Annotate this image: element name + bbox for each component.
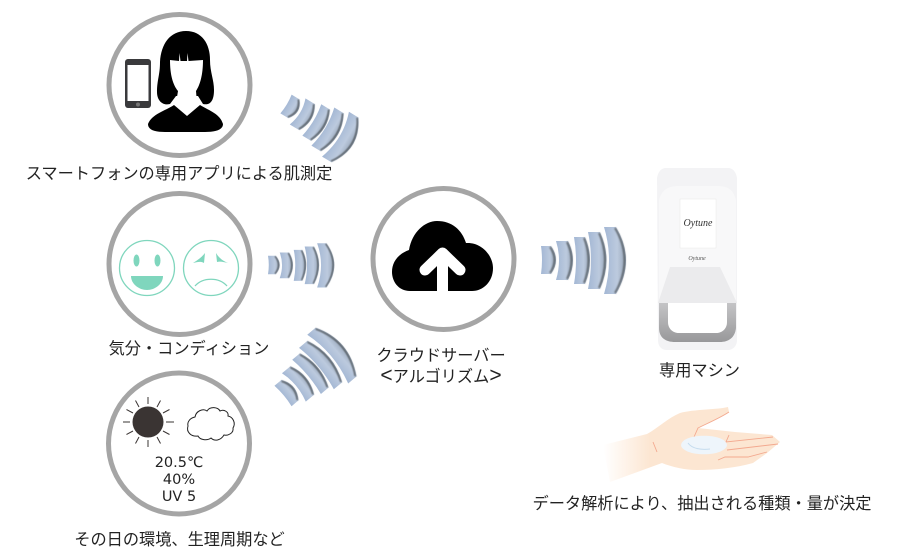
machine lower trapezoid — [658, 267, 737, 303]
icon: sad face — [184, 240, 238, 296]
machine top band — [659, 186, 736, 303]
icon: smartphone — [125, 59, 151, 108]
arrow: signal waves from environment — [263, 322, 364, 421]
machine body — [657, 168, 737, 350]
ring: mood — [109, 194, 250, 334]
finger lines — [653, 412, 778, 460]
heading: server caption — [376, 347, 506, 387]
heading: analysis caption: データ解析により、抽出される種類・量が決定 — [533, 494, 871, 513]
arrow: signal waves to machine — [541, 227, 626, 294]
arrow: signal waves from mood — [268, 243, 334, 287]
heading: machine caption: 専用マシン — [659, 362, 740, 380]
panel: cloud server — [373, 188, 514, 330]
illustration: hand with cream — [603, 407, 780, 482]
heading: server caption: クラウドサーバー — [376, 347, 506, 365]
icon: woman silhouette — [148, 31, 223, 132]
heading: mood caption: 気分・コンディション — [109, 339, 269, 358]
machine screen: Oytune — [684, 218, 713, 229]
icon: sun — [123, 397, 174, 447]
palm and arm — [603, 407, 780, 482]
heading: environment caption: その日の環境、生理周期など — [74, 531, 285, 549]
machine logo: Oytune — [688, 256, 706, 262]
ring: server — [373, 188, 514, 330]
text: weather values — [155, 455, 203, 505]
heading: smartphone caption: スマートフォンの専用アプリによる肌測定 — [26, 165, 332, 183]
machine screen — [680, 199, 716, 248]
icon: cloud upload — [392, 221, 493, 291]
panel: mood and condition — [109, 194, 250, 334]
text: weather values: 20.5℃ — [155, 455, 203, 471]
text: weather values: UV 5 — [162, 489, 196, 505]
machine handle opening — [659, 303, 736, 342]
cream — [681, 436, 727, 454]
ring: environment — [108, 373, 250, 514]
ring: smartphone — [109, 14, 250, 156]
panel: daily environment — [108, 373, 250, 514]
text: weather values: 40% — [163, 472, 195, 488]
panel: smartphone skin measurement — [109, 14, 250, 156]
icon: happy face — [120, 240, 174, 296]
panel: dedicated machine — [657, 168, 737, 350]
icon: cloud — [188, 408, 234, 440]
arrow: signal waves from smartphone — [272, 82, 366, 167]
heading: server caption: <アルゴリズム> — [380, 364, 502, 387]
